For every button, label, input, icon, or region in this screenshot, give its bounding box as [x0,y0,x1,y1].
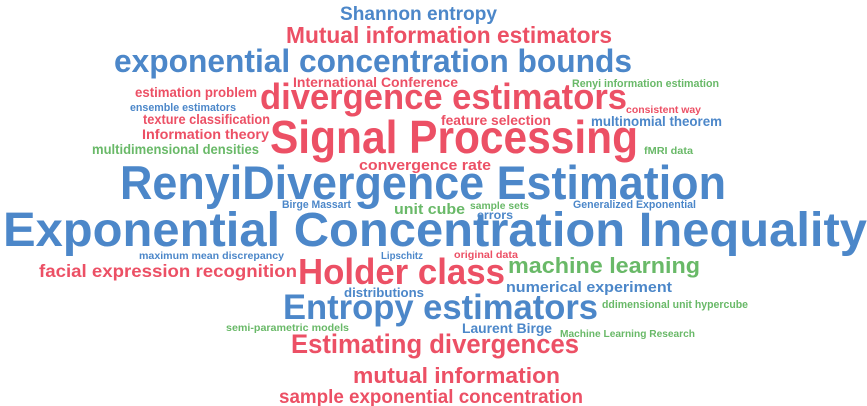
word: estimation problem: estimation problem [135,85,257,100]
word: machine learning: machine learning [508,253,700,278]
word: Exponential Concentration Inequality: Exponential Concentration Inequality [3,204,867,257]
word: distributions: distributions [344,285,424,300]
word: facial expression recognition: facial expression recognition [39,261,297,281]
word: Entropy estimators: Entropy estimators [283,288,598,327]
word: Shannon entropy: Shannon entropy [340,4,497,25]
word: unit cube: unit cube [394,201,465,218]
word: multidimensional densities: multidimensional densities [92,142,259,157]
word: sample sets: sample sets [470,200,529,212]
word: maximum mean discrepancy: maximum mean discrepancy [139,250,284,262]
word: Birge Massart: Birge Massart [282,199,351,211]
word: convergence rate: convergence rate [359,157,491,174]
word: ddimensional unit hypercube: ddimensional unit hypercube [602,299,748,311]
word: original data: original data [454,249,518,261]
word: Laurent Birge: Laurent Birge [462,320,552,336]
word: exponential concentration bounds: exponential concentration bounds [114,43,632,79]
word: errors: errors [477,208,513,222]
word: RenyiDivergence Estimation: RenyiDivergence Estimation [120,156,726,209]
word: divergence estimators: divergence estimators [260,76,627,117]
word: multinomial theorem: multinomial theorem [591,113,722,129]
word: International Conference: International Conference [293,75,459,90]
word: numerical experiment: numerical experiment [506,279,672,296]
word: Lipschitz: Lipschitz [381,250,423,262]
word: consistent way: consistent way [626,104,701,116]
word: Signal Processing: Signal Processing [270,111,638,163]
word: Information theory: Information theory [142,126,269,142]
word: fMRI data: fMRI data [644,145,693,157]
word: mutual information: mutual information [353,363,560,388]
word: Estimating divergences: Estimating divergences [291,329,579,359]
word: Renyi information estimation: Renyi information estimation [572,78,719,90]
word: Machine Learning Research: Machine Learning Research [560,328,695,340]
word: feature selection: feature selection [441,113,551,128]
word: semi-parametric models: semi-parametric models [226,322,349,334]
word: Holder class: Holder class [298,251,505,292]
word: texture classification: texture classification [143,111,270,127]
word: Mutual information estimators: Mutual information estimators [286,22,612,48]
word: Generalized Exponential: Generalized Exponential [573,199,696,211]
word: ensemble estimators: ensemble estimators [130,102,236,114]
